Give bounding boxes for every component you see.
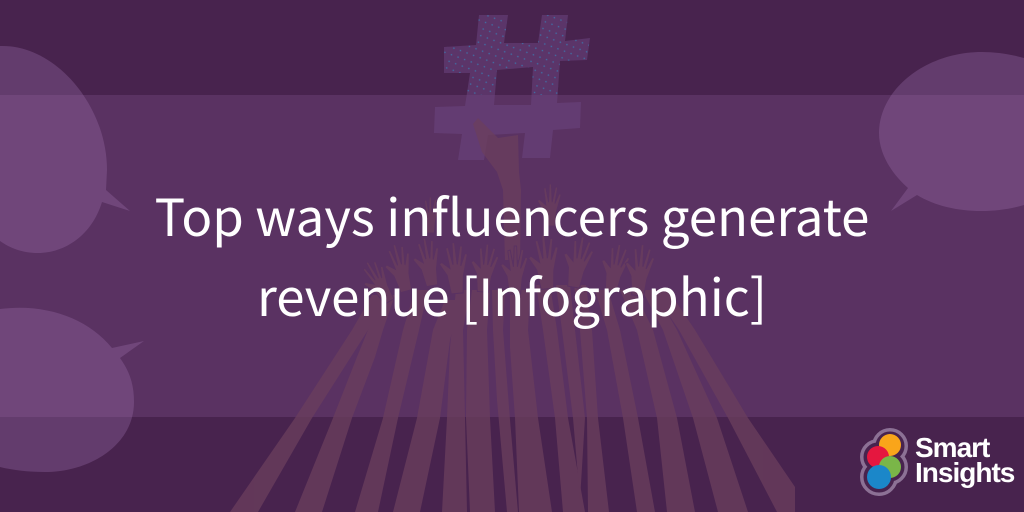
arm 9 bbox=[536, 285, 585, 512]
title: Top ways influencers generate bbox=[155, 177, 869, 251]
arm 13 bbox=[620, 290, 695, 512]
logo wordmark: Insights bbox=[915, 457, 1015, 488]
title bbox=[155, 177, 869, 331]
central hand holding the hashtag bbox=[473, 118, 521, 260]
translucent title band bbox=[0, 95, 1024, 417]
logo wordmark bbox=[915, 432, 1015, 488]
hashtag symbol bbox=[434, 15, 590, 160]
arm 7 bbox=[492, 290, 518, 512]
arm 1 bbox=[230, 295, 383, 512]
arm 12 bbox=[595, 290, 655, 512]
arm 8 bbox=[510, 290, 552, 512]
speech bubble: lower left bbox=[0, 308, 144, 472]
hands bbox=[355, 257, 400, 308]
logo mark bbox=[867, 434, 901, 489]
logo wordmark: Smart bbox=[915, 432, 990, 463]
arm 14 bbox=[642, 290, 748, 512]
speech bubble: right bbox=[879, 52, 1024, 211]
arm 5 bbox=[442, 290, 470, 512]
arm 15 bbox=[652, 290, 795, 512]
arm 11 bbox=[574, 285, 609, 512]
speech bubble: top left bbox=[0, 46, 130, 253]
arm 2 bbox=[295, 295, 395, 512]
arm 3 bbox=[355, 290, 428, 512]
title: revenue [Infographic] bbox=[257, 257, 767, 331]
arm 10 bbox=[556, 285, 585, 500]
arm 6 bbox=[466, 290, 495, 512]
arm 4 bbox=[393, 300, 460, 512]
raised arms and hands bbox=[230, 118, 795, 512]
